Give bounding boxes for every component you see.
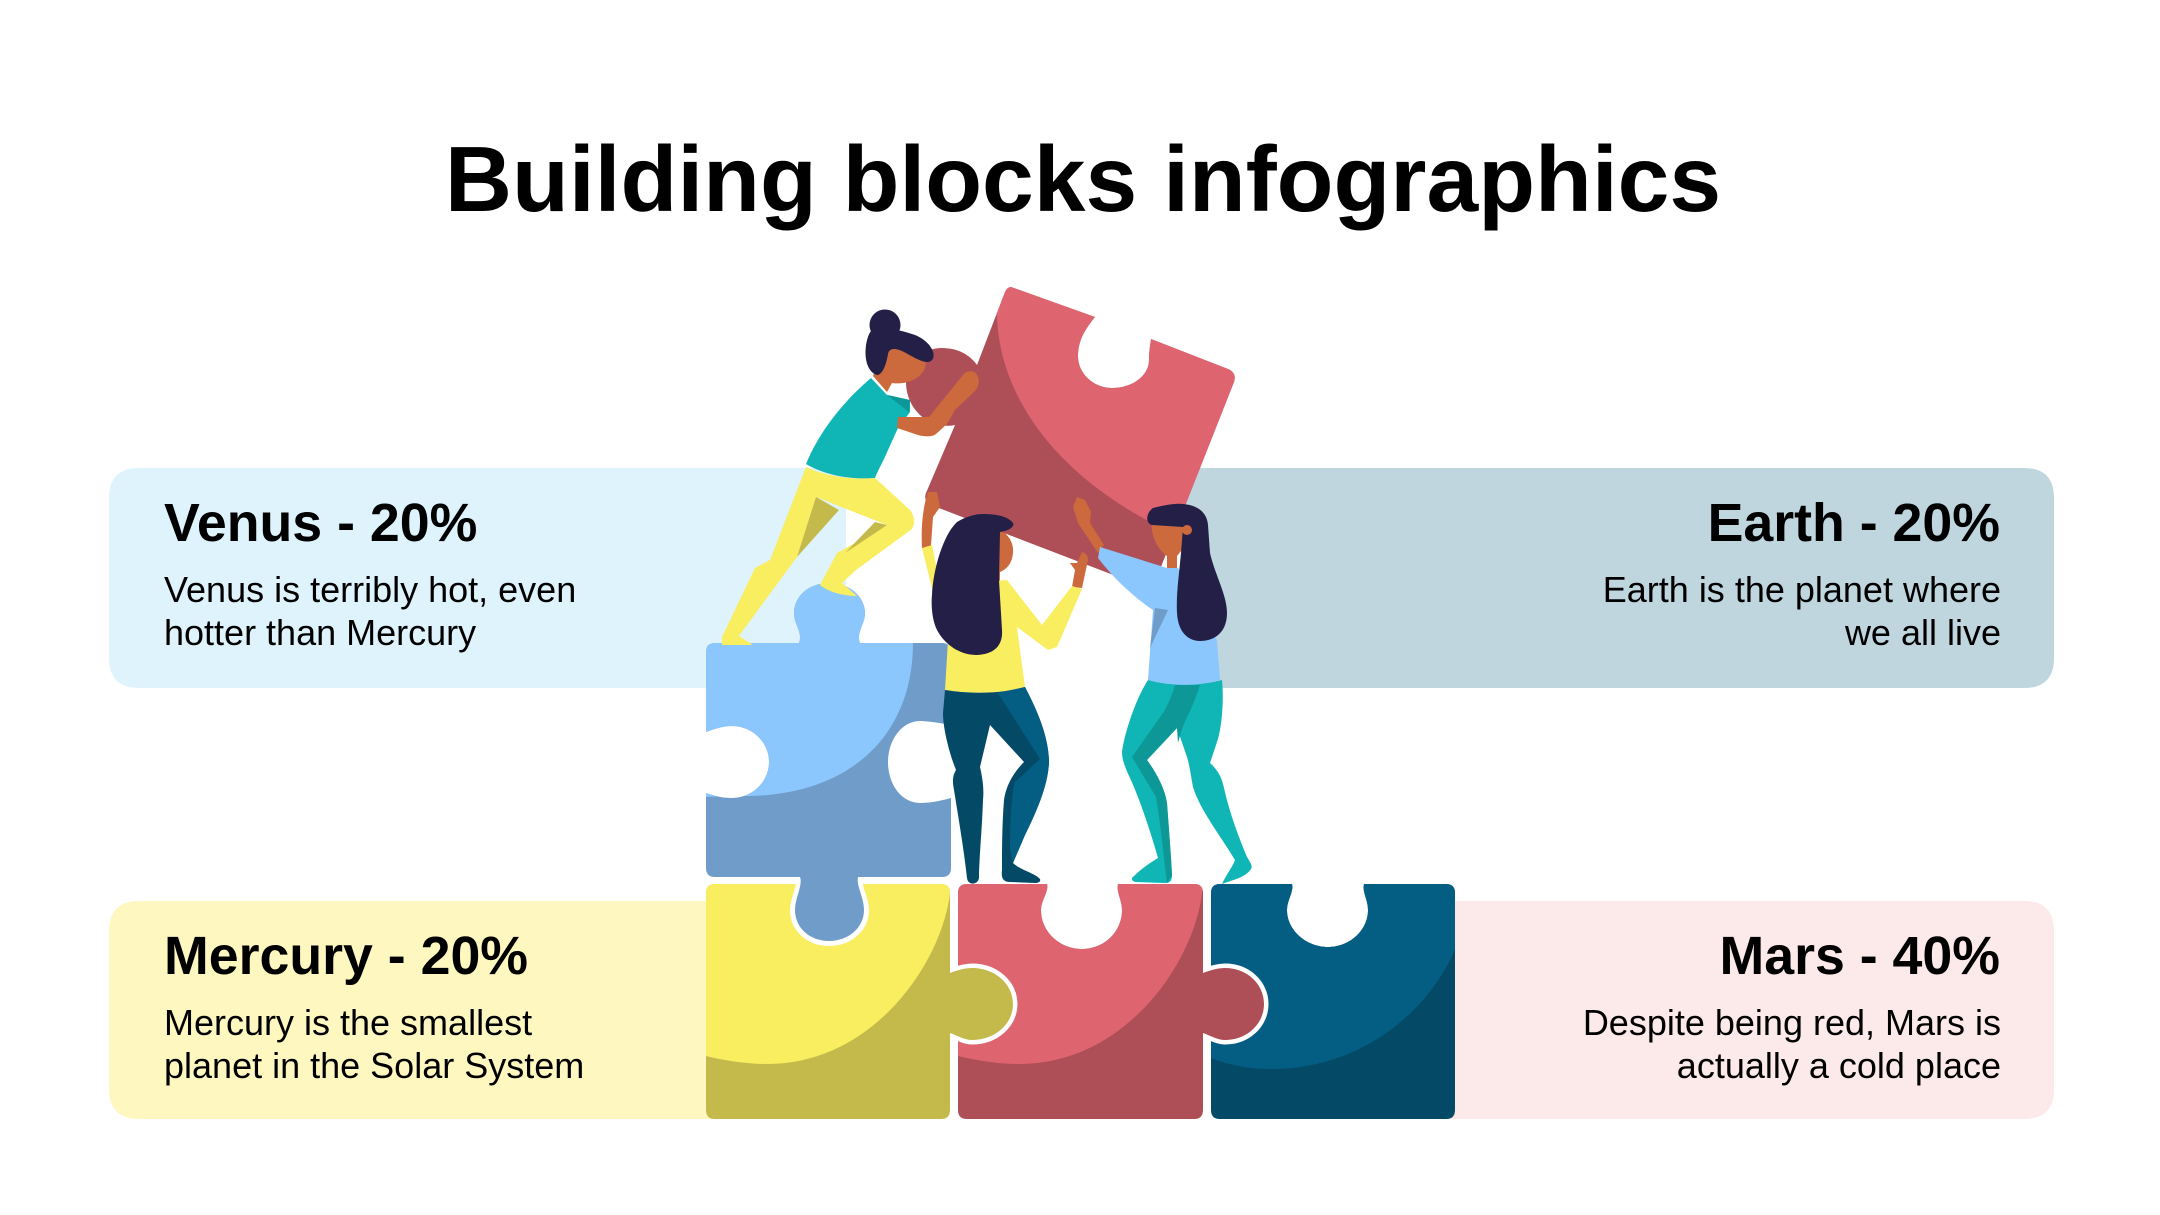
text: Mercury description: planet in the Solar System (164, 1045, 584, 1086)
text: Earth description: we all live (1844, 612, 2001, 653)
text: Mercury description: Mercury is the smallest (164, 1002, 532, 1043)
text: Venus description: hotter than Mercury (164, 612, 476, 653)
text: Mars description: Despite being red, Mars is (1583, 1002, 2001, 1043)
panel: Earth (1185, 468, 2054, 688)
puzzle piece: red (950, 880, 1270, 1125)
puzzle piece: blue (700, 575, 960, 945)
puzzle piece: lifted red (906, 287, 1235, 575)
text: Venus description: Venus is terribly hot, even (164, 569, 576, 610)
panel: Mercury (109, 901, 720, 1119)
heading: Venus: Venus - 20% (164, 493, 477, 553)
title: Building blocks infographics (445, 127, 1721, 231)
text: Earth description: Earth is the planet where (1603, 569, 2001, 610)
heading: Mars: Mars - 40% (1720, 926, 2000, 986)
panel: Venus (109, 468, 846, 688)
figure: woman in blue sweater (1073, 497, 1252, 884)
figure: woman in yellow sweater (922, 492, 1088, 884)
puzzle piece: navy (1200, 880, 1460, 1125)
puzzle piece: yellow (700, 880, 1020, 1125)
text: Mars description: actually a cold place (1677, 1045, 2001, 1086)
figure: woman in teal shirt (722, 310, 979, 645)
heading: Earth: Earth - 20% (1708, 493, 2000, 553)
heading: Mercury: Mercury - 20% (164, 926, 528, 986)
panel: Mars (1440, 901, 2054, 1119)
